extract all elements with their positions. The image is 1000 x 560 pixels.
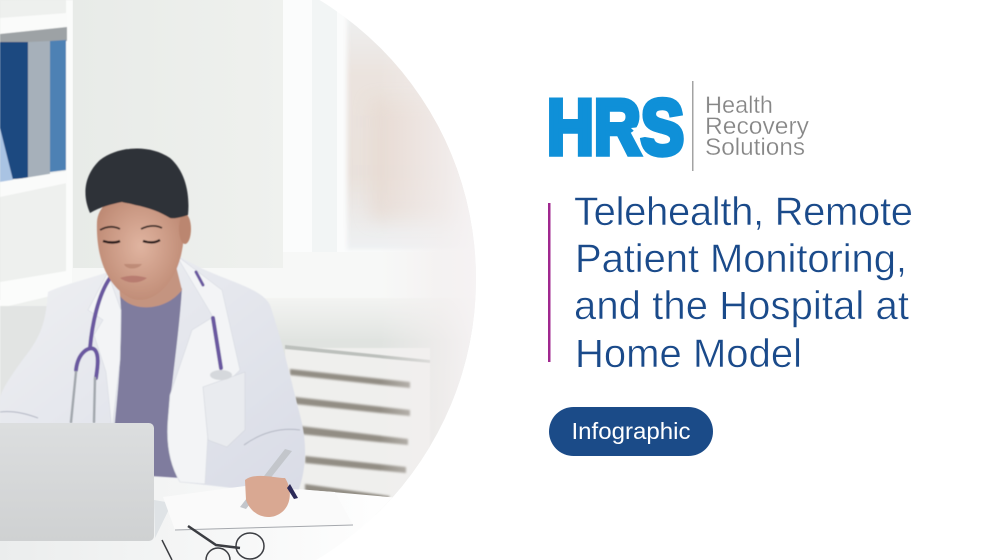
radiator slats: [290, 369, 410, 503]
hair: [85, 148, 188, 218]
mouth: [120, 276, 147, 282]
wall background: [0, 0, 73, 1]
logo: HRS Health Recovery Solutions: [547, 81, 809, 171]
neck: [119, 268, 182, 308]
laptop: [0, 423, 172, 541]
title: Patient Monitoring,: [575, 237, 907, 281]
writing hand and pen: [240, 449, 298, 517]
title: and the Hospital at: [574, 284, 909, 328]
logo text: Recovery: [705, 113, 809, 140]
badge: Infographic: [549, 407, 713, 456]
window sill: [74, 268, 283, 298]
photo: doctor at desk in circular crop: [0, 0, 485, 560]
window and frame: [283, 0, 467, 252]
doctor figure: [0, 148, 305, 492]
logo wordmark HRS: HRS: [547, 83, 684, 171]
shirt: [112, 288, 182, 478]
shelving unit with binders: [0, 0, 73, 440]
right edge fade: [386, 92, 474, 474]
radiator: [267, 300, 470, 498]
logo text: Solutions: [705, 134, 805, 161]
coat pocket: [203, 372, 245, 447]
logo text: [705, 92, 809, 161]
logo divider: [692, 81, 694, 171]
title: [574, 190, 913, 376]
notebook: [163, 486, 353, 530]
face: [96, 202, 184, 291]
logo text: Health: [705, 92, 773, 119]
ear: [179, 214, 191, 244]
desk: [0, 476, 400, 560]
lab coat: [0, 255, 305, 492]
accent bar: [548, 203, 550, 362]
nose: [124, 264, 142, 268]
badge: Infographic: Infographic: [572, 418, 690, 444]
title: Home Model: [575, 332, 802, 376]
eyebrows: [100, 226, 162, 230]
stethoscope: [71, 272, 221, 422]
glasses: [162, 526, 264, 560]
stethoscope chest piece: [210, 370, 232, 380]
coat lapels: [88, 255, 240, 484]
title: Telehealth, Remote: [574, 190, 913, 234]
wall shadow edge: [73, 252, 283, 268]
sleeve fold: [244, 429, 300, 445]
eyes: [103, 240, 160, 242]
